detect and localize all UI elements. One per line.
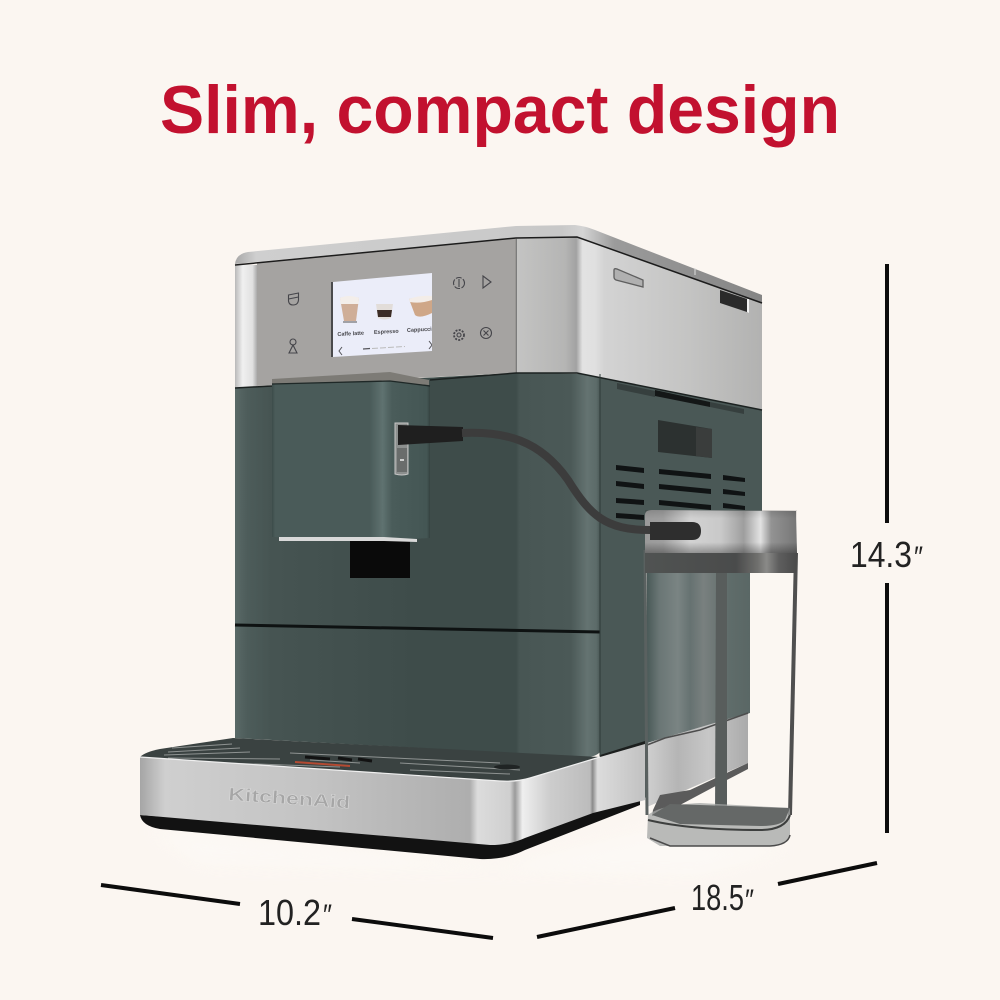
- dimension: height: 14.3: [850, 534, 912, 575]
- brand embossed: KitchenAid: [228, 784, 351, 813]
- teal top edge line: [235, 373, 762, 410]
- carafe rod: [715, 573, 727, 821]
- carafe foot: [647, 803, 790, 846]
- base tray: [140, 738, 645, 859]
- icon: settings: [454, 330, 464, 340]
- cup: cappuccino: [409, 296, 432, 317]
- control icons: [288, 276, 492, 353]
- black foot: [140, 795, 640, 859]
- milk tube: [462, 433, 701, 540]
- touch screen: Cappuccino: [407, 326, 439, 334]
- icon: cup: [288, 293, 298, 305]
- dimension: depth: 18.5: [691, 877, 744, 918]
- dimension: height: ″: [914, 541, 923, 574]
- side vents: [616, 465, 745, 520]
- dimension: depth: [537, 863, 877, 937]
- dimension: width: ″: [323, 899, 332, 932]
- chrome strip: [279, 537, 417, 542]
- carafe lid: [645, 510, 797, 553]
- dimension: width: [101, 885, 493, 938]
- milk frother module: [272, 372, 463, 542]
- side silver base band: [593, 744, 645, 814]
- cup: caffe latte: [340, 296, 359, 322]
- tube connector: [650, 522, 701, 540]
- infographic canvas: [100, 84, 922, 940]
- drink labels: Caffe latte: [337, 331, 364, 338]
- screen nav: [339, 341, 432, 355]
- cup: espresso: [376, 304, 393, 320]
- title: Slim, compact design: [160, 72, 840, 148]
- dimension: depth: ″: [745, 884, 754, 917]
- teal front body: [235, 373, 600, 757]
- touch screen: Espresso: [374, 329, 399, 336]
- front bottom drawer seam: [235, 625, 600, 632]
- grille lines: [164, 744, 520, 774]
- milk carafe: [645, 510, 797, 846]
- icon: play: [483, 276, 491, 288]
- touch screen: [331, 273, 439, 357]
- side handle recess: [658, 420, 712, 458]
- coffee machine: [140, 225, 797, 875]
- machine side panel: [593, 375, 762, 814]
- icon: cancel: [480, 328, 492, 338]
- dimension: width: 10.2: [258, 892, 321, 933]
- silver top side panel: [516, 237, 762, 410]
- carafe band: [645, 553, 797, 573]
- carafe body: [645, 553, 797, 815]
- icon: person: [289, 339, 297, 353]
- top recess strips: [617, 383, 655, 397]
- dimension: height: [850, 264, 923, 833]
- top lid: [235, 225, 762, 373]
- tray button: [494, 764, 520, 770]
- coffee spout opening: [350, 541, 410, 578]
- tray red mark: [295, 762, 350, 766]
- milk outlet: [395, 423, 463, 475]
- silver front band: [140, 744, 645, 845]
- icon: bean: [454, 278, 464, 288]
- silver left strip: [235, 265, 257, 388]
- side latch: [614, 269, 643, 287]
- floor shadow: [150, 830, 790, 875]
- lid notch: [720, 290, 747, 312]
- grey control panel: [257, 238, 515, 386]
